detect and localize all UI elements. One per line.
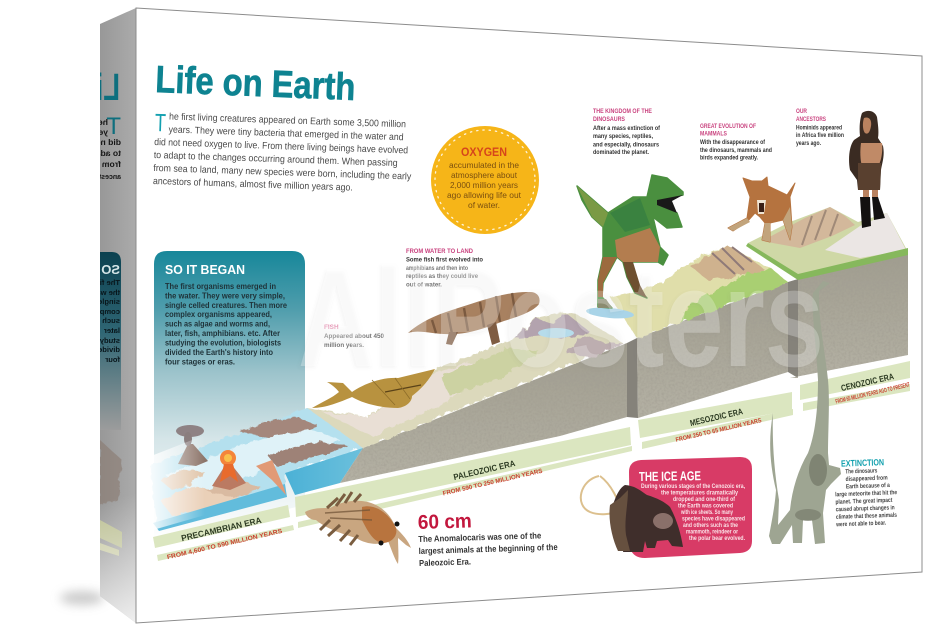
body: the ice age: the temperatures dramatically — [661, 490, 738, 496]
paleozoic top surface — [307, 312, 623, 448]
canvas side panel — [100, 8, 136, 622]
oxygen callout — [431, 126, 539, 234]
body: so it began: The first organisms emerged in — [165, 282, 276, 291]
era band: cenozoic: CENOZOIC ERA — [840, 371, 895, 393]
heading: the ice age: THE ICE AGE — [639, 468, 701, 484]
body: so it began: later, fish, amphibians. etc. After — [165, 329, 281, 338]
illustration: saber-toothed cat — [728, 177, 795, 242]
illustration: anomalocaris — [305, 492, 411, 564]
illustration: fish — [312, 369, 435, 408]
callout: 60 cm: 60 cm — [417, 510, 472, 534]
illustration: brachiosaur — [769, 281, 841, 544]
oxygen callout: accumulated in the — [449, 160, 519, 170]
label: fish — [324, 324, 384, 349]
label: kingdom of the dinosaurs: many species, reptiles, — [593, 133, 653, 140]
era band: cenozoic — [800, 361, 911, 411]
terrain: cenozoic era block — [746, 207, 908, 378]
era band: mesozoic: MESOZOIC ERA — [689, 406, 744, 428]
label: from water to land: reptiles as they could live — [406, 273, 478, 280]
title: Life on Earth — [155, 59, 356, 109]
era band: paleozoic: FROM 590 TO 250 MILLION YEARS — [442, 468, 543, 497]
label: extinction: large meteorite that hit the — [835, 489, 898, 498]
label: fish: FISH — [324, 324, 339, 331]
callout: 60 cm: largest animals at the beginning of the — [419, 542, 558, 556]
label: extinction: Earth because of a — [846, 482, 890, 490]
illustration: dinosaur — [577, 175, 683, 308]
label: great evolution of mammals — [700, 123, 772, 162]
era band: precambrian — [153, 505, 294, 561]
label: extinction: The dinosaurs — [845, 467, 878, 475]
body: the ice age — [641, 483, 745, 542]
label: extinction: were not able to bear. — [835, 520, 887, 528]
cenozoic mountain — [762, 207, 855, 248]
cenozoic mountain ridges — [802, 210, 838, 245]
mirrored intro on side: T — [106, 113, 121, 140]
heading: so it began: SO IT BEGAN — [165, 262, 245, 277]
coastal fan — [256, 460, 286, 495]
body: the ice age: dropped and one-third of — [673, 496, 736, 503]
icon: erupting volcano — [212, 450, 246, 490]
mirrored intro on side — [100, 118, 121, 179]
label: extinction — [833, 457, 899, 528]
intro text block: he first living creatures appeared on Earth some 3,500 million — [169, 111, 406, 130]
label: kingdom of the dinosaurs: dominated the planet. — [593, 149, 649, 156]
mirrored intro on side: ancestors — [88, 174, 121, 181]
body: the ice age: the polar bear evolved. — [689, 535, 745, 542]
label: great evolution of mammals: GREAT EVOLUTION OF — [700, 123, 756, 130]
mirrored intro on side: from sea — [85, 159, 121, 169]
callout: 60 cm — [417, 508, 558, 568]
illustration: human ancestor — [849, 111, 885, 228]
cenozoic snow peak — [825, 213, 906, 258]
label: kingdom of the dinosaurs — [593, 108, 661, 156]
cenozoic rock face — [790, 252, 908, 378]
panel: so it began — [154, 251, 305, 540]
paleozoic green land — [440, 348, 540, 396]
era band: precambrian: FROM 4,600 TO 590 MILLION YEARS — [166, 528, 283, 561]
label: great evolution of mammals: birds expanded greatly. — [700, 154, 758, 162]
body: so it began — [165, 282, 287, 366]
label: kingdom of the dinosaurs: DINOSAURS — [593, 116, 626, 123]
label: our ancestors: OUR — [796, 108, 807, 115]
label: fish: Appeared about 450 — [324, 333, 384, 340]
mirrored box text on side: four — [105, 355, 120, 364]
mirrored box text on side: such — [102, 316, 120, 325]
oxygen callout: of water. — [468, 200, 500, 210]
body: the ice age: and others such as the — [683, 522, 738, 529]
label: our ancestors: Hominids appeared — [796, 124, 842, 132]
cenozoic grass edge — [746, 243, 908, 280]
label: kingdom of the dinosaurs: After a mass extinction of — [593, 125, 661, 132]
precambrian foam — [165, 425, 340, 495]
intro text block: ancestors of humans, almost five million years ago. — [153, 176, 353, 194]
label: from water to land: Some fish first evolved into — [406, 256, 483, 264]
label: extinction: EXTINCTION — [841, 457, 884, 469]
label: from water to land: out of water. — [406, 282, 442, 288]
intro text block: did not need oxygen to live. From there living beings have evolved — [154, 137, 408, 156]
cenozoic top surface — [748, 207, 908, 279]
label: great evolution of mammals: With the disappearance of — [700, 139, 766, 146]
mesozoic mountain ridges — [712, 247, 752, 274]
label: from water to land — [406, 248, 483, 288]
mirrored box text on side — [100, 265, 120, 362]
mirrored box text on side: The first — [90, 278, 120, 287]
mesozoic rock face — [637, 282, 788, 418]
terrain: mesozoic era block — [586, 245, 788, 418]
mirrored box on side — [100, 252, 121, 430]
body: the ice age: the Earth was covered — [678, 502, 733, 510]
mirrored title on side: Li — [96, 67, 120, 109]
mirrored box text on side: the water — [87, 288, 120, 297]
body: so it began: studying the evolution, biologists — [165, 338, 281, 348]
label: from water to land: FROM WATER TO LAND — [406, 248, 473, 255]
mirrored box text on side: SO — [101, 262, 120, 277]
lake — [586, 306, 634, 320]
oxygen callout: OXYGEN — [461, 145, 507, 159]
mirrored intro on side: to adapt — [87, 148, 121, 158]
mirrored intro on side: he first — [79, 117, 108, 127]
lake — [538, 328, 574, 338]
mirrored intro on side: years — [85, 127, 108, 137]
label: great evolution of mammals: the dinosaurs, mammals and — [700, 147, 772, 154]
era band: paleozoic: PALEOZOIC ERA — [453, 458, 516, 482]
intro text block: from sea to land, many new species were born, including the early — [153, 163, 412, 183]
body: so it began: single celled creatures. Then more — [165, 301, 287, 310]
label: extinction: climate that these animals — [836, 512, 897, 521]
body: so it began: the water. They were very simple, — [165, 292, 285, 300]
mirrored box text on side: studying — [88, 336, 120, 345]
oxygen callout: atmosphere about — [451, 170, 518, 180]
body: the ice age: species have disappeared — [682, 516, 745, 522]
panel: the ice age — [629, 457, 752, 558]
precambrian islands — [160, 418, 348, 516]
paleozoic pale rock — [322, 362, 500, 436]
mesozoic mountain — [690, 245, 765, 280]
era band: precambrian: PRECAMBRIAN ERA — [180, 515, 262, 543]
era band: mesozoic: FROM 250 TO 65 MILLION YEARS — [675, 417, 762, 444]
paleozoic mountains — [515, 313, 590, 338]
body: the ice age: with ice sheets. So many — [680, 509, 733, 516]
drop cap: T — [154, 109, 166, 137]
callout: 60 cm: The Anomalocaris was one of the — [418, 530, 542, 544]
intro text block — [153, 109, 413, 196]
canvas shadow — [60, 591, 104, 605]
label: fish: million years. — [324, 342, 364, 349]
body: the ice age: During various stages of the Cenozoic era, — [641, 483, 745, 490]
terrain: paleozoic era block — [307, 312, 627, 483]
illustration: amphibian — [408, 292, 540, 345]
body: the ice age: mammoth, reindeer or — [686, 528, 738, 536]
callout: 60 cm: Paleozoic Era. — [419, 556, 471, 568]
mirrored box text on side: later — [104, 326, 120, 335]
label: extinction: caused abrupt changes in — [836, 504, 895, 513]
oxygen callout: 2,000 million years — [450, 180, 518, 190]
mirrored intro on side: did not — [92, 137, 121, 147]
left edge fade — [146, 435, 205, 532]
label: our ancestors — [796, 108, 844, 147]
second water block face — [285, 448, 363, 495]
label: kingdom of the dinosaurs: THE KINGDOM OF THE — [593, 108, 653, 115]
label: our ancestors: in Africa five million — [796, 132, 844, 139]
mesozoic gap — [627, 338, 638, 418]
illustration: mammoth — [581, 476, 683, 552]
label: extinction: planet. The great impact — [835, 497, 893, 506]
icon: smoking volcano — [176, 425, 208, 466]
body: so it began: such as algae and worms and, — [165, 320, 270, 328]
mirrored box text on side: single — [98, 297, 120, 306]
oxygen callout: ago allowing life out — [447, 190, 522, 200]
mirrored terrain on side — [100, 440, 122, 505]
label: our ancestors: ANCESTORS — [796, 116, 827, 123]
era band: paleozoic — [295, 427, 632, 528]
cenozoic gap — [788, 279, 798, 378]
mirrored box text on side: divided — [93, 345, 120, 354]
label: from water to land: amphibians and then into — [406, 265, 468, 272]
label: extinction: disappeared from — [846, 475, 888, 483]
label: our ancestors: years ago. — [796, 140, 821, 147]
era band: mesozoic — [638, 392, 793, 449]
body: so it began: four stages or eras. — [165, 358, 235, 366]
mesozoic green edge — [680, 270, 788, 322]
label: kingdom of the dinosaurs: and especially, dinosaurs — [593, 142, 659, 148]
precambrian front water face — [153, 484, 287, 531]
terrain: precambrian era block — [146, 408, 363, 532]
intro text block: years. They were tiny bacteria that emerged in the water and — [168, 124, 404, 143]
mesozoic top surface — [610, 245, 788, 338]
mirrored era band on side — [100, 520, 122, 548]
intro text block: to adapt to the changes occurring around them. When passing — [154, 150, 398, 169]
paleozoic rock face — [340, 343, 627, 483]
label: great evolution of mammals: MAMMALS — [700, 130, 728, 138]
mirrored box text on side: complex — [88, 307, 120, 316]
body: so it began: divided the Earth's history into — [165, 348, 273, 357]
body: so it began: complex organisms appeared, — [165, 310, 272, 319]
